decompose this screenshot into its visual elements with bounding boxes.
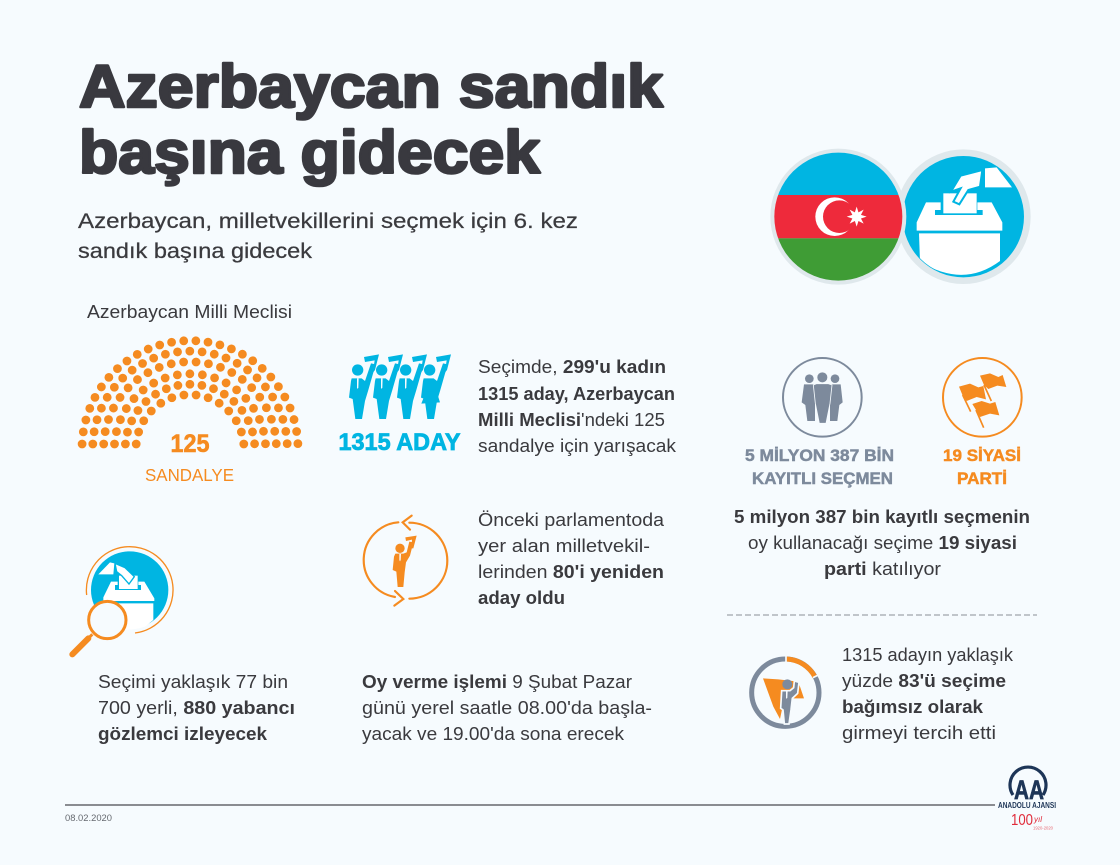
icon: re-nominated deputy bbox=[364, 516, 447, 606]
date: 08.02.2020 bbox=[65, 813, 112, 824]
chart: parliament seats bbox=[82, 341, 298, 444]
label: 1315 ADAY: 1315 ADAY bbox=[338, 429, 460, 456]
label: political parties: 19 SİYASİ bbox=[943, 446, 1021, 465]
text: candidates: Milli Meclisi'ndeki 125 bbox=[478, 410, 665, 430]
text: re-nominated: yer alan milletvekil- bbox=[478, 536, 650, 556]
text: candidates bbox=[478, 357, 677, 456]
label: registered voters bbox=[745, 446, 894, 488]
title: başına gidecek bbox=[79, 119, 541, 186]
text: re-nominated: aday oldu bbox=[478, 588, 565, 608]
text: observers: 700 yerli, 880 yabancı bbox=[98, 698, 295, 718]
seat count bbox=[145, 430, 234, 485]
text: independents: 1315 adayın yaklaşık bbox=[842, 645, 1014, 665]
seat count: SANDALYE bbox=[145, 465, 234, 485]
title bbox=[79, 53, 664, 186]
label: political parties: PARTİ bbox=[957, 469, 1007, 488]
text: voters and parties bbox=[734, 507, 1030, 579]
label: political parties bbox=[943, 446, 1021, 488]
subtitle bbox=[78, 209, 578, 263]
text: independents: girmeyi tercih etti bbox=[842, 723, 996, 743]
logo: Anadolu Ajansı: ANADOLU AJANSI bbox=[998, 801, 1056, 810]
icon: party flags bbox=[943, 358, 1022, 437]
text: independents: yüzde 83'ü seçime bbox=[842, 671, 1006, 691]
text: candidates: Seçimde, 299'u kadın bbox=[478, 357, 666, 377]
logo: Anadolu Ajansı bbox=[998, 767, 1056, 830]
text: candidates: 1315 aday, Azerbaycan bbox=[478, 384, 675, 404]
text: independents: bağımsız olarak bbox=[842, 697, 984, 717]
text: voters and parties: oy kullanacağı seçime 19 siyasi bbox=[748, 533, 1017, 553]
logo: Anadolu Ajansı: 100 bbox=[1011, 812, 1033, 829]
text: independents bbox=[842, 645, 1014, 743]
text: observers: gözlemci izleyecek bbox=[98, 724, 268, 744]
seat count: 125 bbox=[170, 430, 210, 458]
text: voting hours bbox=[362, 672, 652, 744]
icon: independent candidates ring bbox=[752, 656, 819, 726]
logo: Anadolu Ajansı: yıl bbox=[1033, 815, 1042, 824]
subtitle: Azerbaycan, milletvekillerini seçmek için 6. kez bbox=[78, 209, 578, 233]
text: voting hours: yacak ve 19.00'da sona erecek bbox=[362, 724, 625, 744]
text: observers: Seçimi yaklaşık 77 bin bbox=[98, 672, 288, 692]
icon: Azerbaijan flag circle bbox=[770, 148, 907, 285]
text: re-nominated bbox=[478, 510, 665, 608]
text: candidates: sandalye için yarışacak bbox=[478, 436, 677, 456]
text: voters and parties: parti katılıyor bbox=[824, 559, 941, 579]
text: re-nominated: Önceki parlamentoda bbox=[478, 510, 665, 530]
icon: candidates bbox=[349, 354, 451, 419]
label: Azerbaycan Milli Meclisi: Azerbaycan Milli Meclisi bbox=[87, 301, 292, 322]
text: voting hours: günü yerel saatle 08.00'da başla- bbox=[362, 698, 652, 718]
label: registered voters: KAYITLI SEÇMEN bbox=[752, 469, 893, 488]
icon: ballot box circle bbox=[896, 149, 1031, 284]
text: observers bbox=[98, 672, 295, 744]
text: voters and parties: 5 milyon 387 bin kayıtlı seçmenin bbox=[734, 507, 1030, 527]
icon: voters bbox=[783, 358, 862, 437]
logo: Anadolu Ajansı: AA bbox=[1014, 775, 1044, 805]
text: voting hours: Oy verme işlemi 9 Şubat Pazar bbox=[362, 672, 632, 692]
label: registered voters: 5 MİLYON 387 BİN bbox=[745, 446, 894, 465]
logo: Anadolu Ajansı: 1920-2020 bbox=[1033, 826, 1053, 830]
title: Azerbaycan sandık bbox=[79, 53, 664, 120]
text: re-nominated: lerinden 80'i yeniden bbox=[478, 562, 664, 582]
subtitle: sandık başına gidecek bbox=[78, 239, 312, 263]
icon: magnifier over ballot box bbox=[72, 547, 173, 654]
